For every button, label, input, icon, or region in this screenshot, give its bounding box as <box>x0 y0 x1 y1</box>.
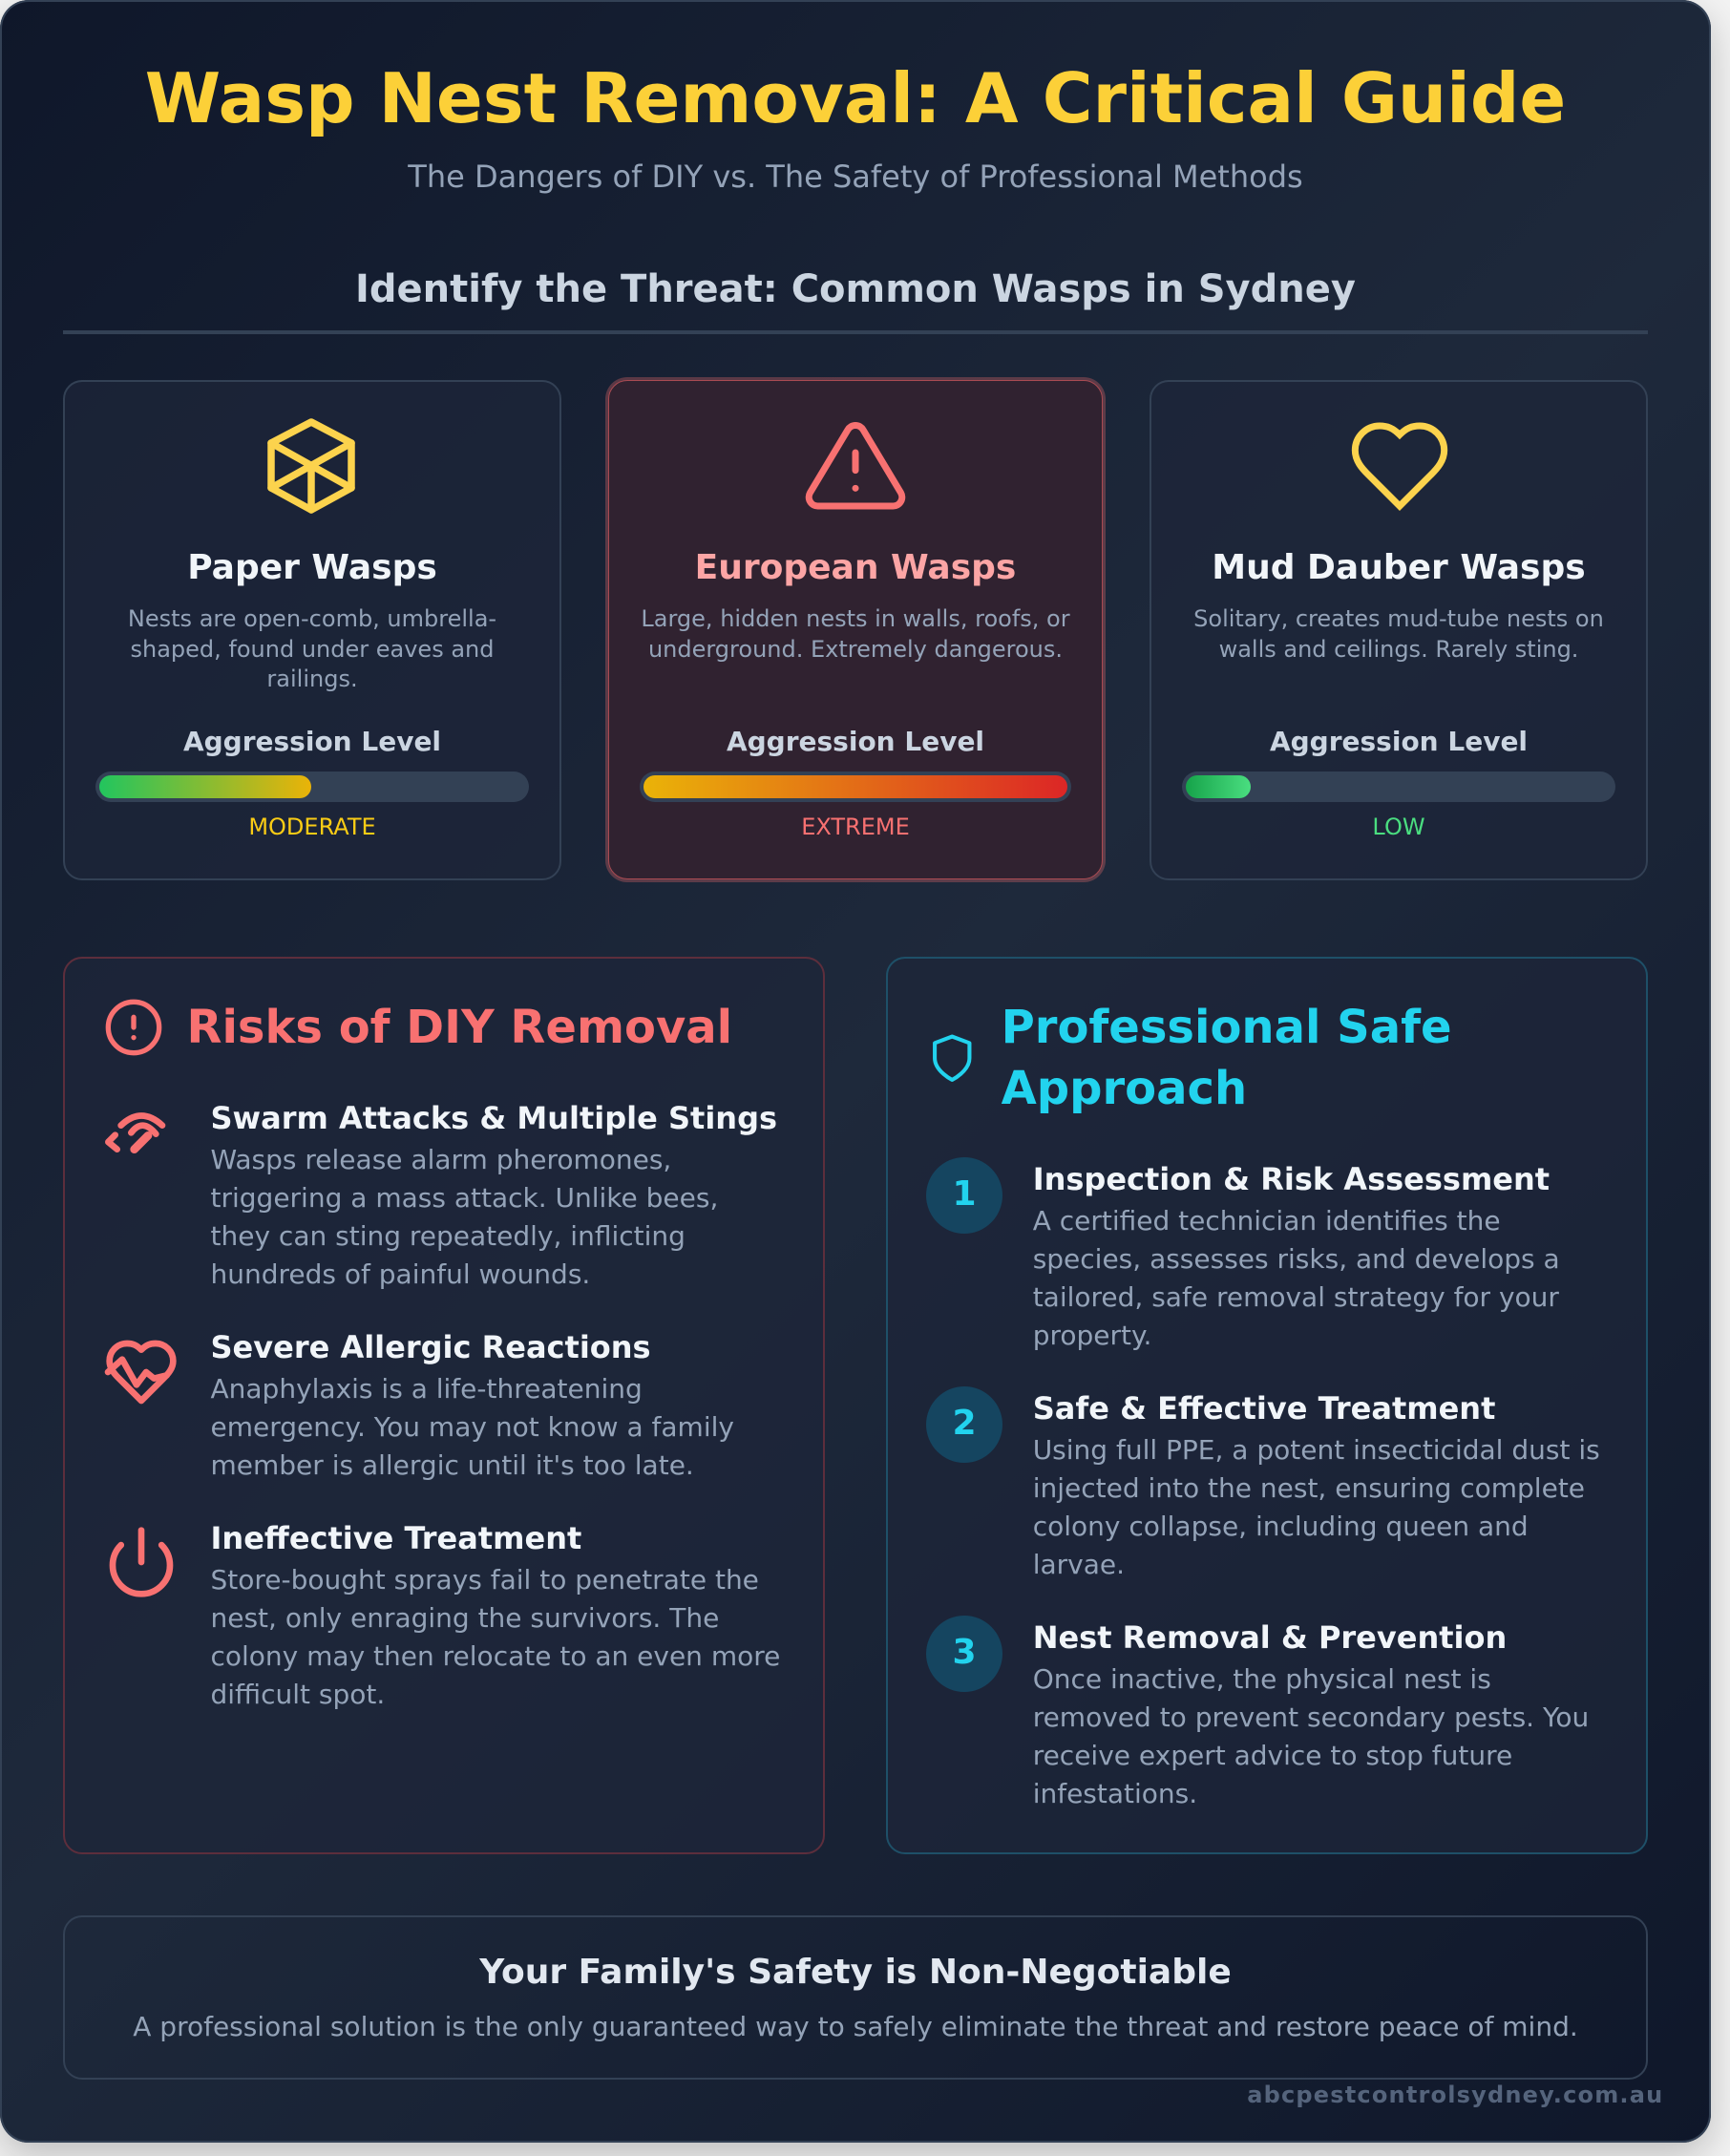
panel: risks of DIY removal <box>63 957 825 1854</box>
aggression value: LOW <box>1372 814 1425 840</box>
aggression value: EXTREME <box>801 814 910 840</box>
step number: 3 <box>952 1633 977 1671</box>
step number <box>926 1616 1002 1692</box>
risk title: Swarm Attacks & Multiple Stings <box>210 1100 777 1136</box>
icon: alert circle <box>105 999 162 1056</box>
step text: injected into the nest, ensuring complete <box>1033 1472 1585 1503</box>
step text: property. <box>1033 1320 1151 1350</box>
step 3 <box>926 1616 1589 1808</box>
step 1 <box>926 1157 1560 1350</box>
risk text: member is allergic until it's too late. <box>210 1449 694 1481</box>
risk text: triggering a mass attack. Unlike bees, <box>210 1182 718 1213</box>
card description: walls and ceilings. Rarely sting. <box>1219 636 1578 663</box>
closing heading: Your Family's Safety is Non-Negotiable <box>479 1953 1232 1992</box>
panel heading <box>1001 1001 1452 1115</box>
panel: professional safe approach <box>886 957 1648 1854</box>
step text: A certified technician identifies the <box>1033 1205 1501 1236</box>
panel: mud dauber wasps card <box>1150 380 1648 880</box>
subtitle: The Dangers of DIY vs. The Safety of Professional Methods <box>408 159 1303 195</box>
aggression bar: extreme <box>640 772 1071 802</box>
aggression label: Aggression Level <box>183 726 441 757</box>
aggression label: Aggression Level <box>1270 726 1528 757</box>
step number <box>926 1386 1002 1463</box>
icon: swarm signal <box>105 1112 166 1153</box>
risk text: nest, only enraging the survivors. The <box>210 1602 719 1634</box>
icon: power <box>109 1527 174 1597</box>
closing text: A professional solution is the only guaranteed way to safely eliminate the threat and restore peace of mind. <box>133 2011 1578 2041</box>
icon: shield <box>933 1035 972 1082</box>
card title: Paper Wasps <box>187 548 437 586</box>
risk: swarm attacks <box>105 1100 777 1289</box>
panel heading: Professional Safe <box>1002 1001 1452 1054</box>
step text: tailored, safe removal strategy for your <box>1033 1281 1559 1312</box>
risk: ineffective treatment <box>109 1520 780 1710</box>
risk title: Ineffective Treatment <box>210 1520 581 1556</box>
step text: infestations. <box>1033 1778 1197 1808</box>
aggression bar: moderate <box>95 772 529 802</box>
panel heading: Approach <box>1002 1062 1247 1115</box>
card description: railings. <box>266 666 358 692</box>
step text <box>1033 1663 1589 1808</box>
aggression value: MODERATE <box>248 814 376 840</box>
icon: box <box>267 418 355 514</box>
risk text <box>210 1373 734 1481</box>
card description: Large, hidden nests in walls, roofs, or <box>641 605 1070 632</box>
step 2 <box>926 1386 1600 1579</box>
step text <box>1033 1434 1600 1579</box>
risk title: Severe Allergic Reactions <box>210 1329 651 1365</box>
panel: european wasps card <box>606 380 1105 880</box>
card description: shaped, found under eaves and <box>130 636 494 663</box>
step text: removed to prevent secondary pests. You <box>1033 1702 1589 1732</box>
aggression label: Aggression Level <box>727 726 984 757</box>
panel heading: Risks of DIY Removal <box>187 1001 732 1054</box>
step number: 2 <box>952 1404 977 1442</box>
icon: heart pulse <box>105 1341 177 1404</box>
panel: paper wasps card <box>63 380 561 880</box>
risk text <box>210 1564 780 1710</box>
step title: Nest Removal & Prevention <box>1033 1619 1507 1656</box>
risk: allergic reactions <box>105 1329 734 1481</box>
icon: heart <box>1352 422 1447 511</box>
risk text <box>210 1144 718 1289</box>
card description <box>641 605 1070 663</box>
step title: Safe & Effective Treatment <box>1033 1390 1495 1427</box>
section heading: Identify the Threat: Common Wasps in Sydney <box>355 267 1356 311</box>
card description <box>1193 605 1604 663</box>
title: Wasp Nest Removal: A Critical Guide <box>145 58 1566 138</box>
step text: receive expert advice to stop future <box>1033 1740 1512 1770</box>
card title: European Wasps <box>695 548 1016 586</box>
panel: closing message <box>63 1915 1648 2080</box>
step number <box>926 1157 1002 1234</box>
step text: Once inactive, the physical nest is <box>1033 1663 1491 1694</box>
risk text: colony may then relocate to an even more <box>210 1640 780 1672</box>
aggression bar: low <box>1182 772 1615 802</box>
risk text: difficult spot. <box>210 1679 385 1710</box>
risk text: Anaphylaxis is a life-threatening <box>210 1373 643 1405</box>
card description: underground. Extremely dangerous. <box>648 636 1063 663</box>
risk text: hundreds of painful wounds. <box>210 1258 590 1289</box>
card description <box>128 605 496 692</box>
risk text: Wasps release alarm pheromones, <box>210 1144 671 1174</box>
step text: larvae. <box>1033 1549 1125 1579</box>
step text: species, assesses risks, and develops a <box>1033 1243 1560 1274</box>
card title: Mud Dauber Wasps <box>1212 548 1586 586</box>
card description: Solitary, creates mud-tube nests on <box>1193 605 1604 632</box>
step number: 1 <box>952 1174 977 1213</box>
icon: warning triangle <box>806 422 905 510</box>
step text: colony collapse, including queen and <box>1033 1511 1529 1541</box>
step text <box>1033 1205 1560 1350</box>
risk text: Store-bought sprays fail to penetrate the <box>210 1564 759 1596</box>
website credit: abcpestcontrolsydney.com.au <box>1247 2082 1663 2108</box>
step text: Using full PPE, a potent insecticidal dust is <box>1033 1434 1600 1465</box>
risk text: emergency. You may not know a family <box>210 1411 734 1443</box>
step title: Inspection & Risk Assessment <box>1033 1161 1550 1197</box>
risk text: they can sting repeatedly, inflicting <box>210 1220 686 1251</box>
card description: Nests are open-comb, umbrella- <box>128 605 496 632</box>
